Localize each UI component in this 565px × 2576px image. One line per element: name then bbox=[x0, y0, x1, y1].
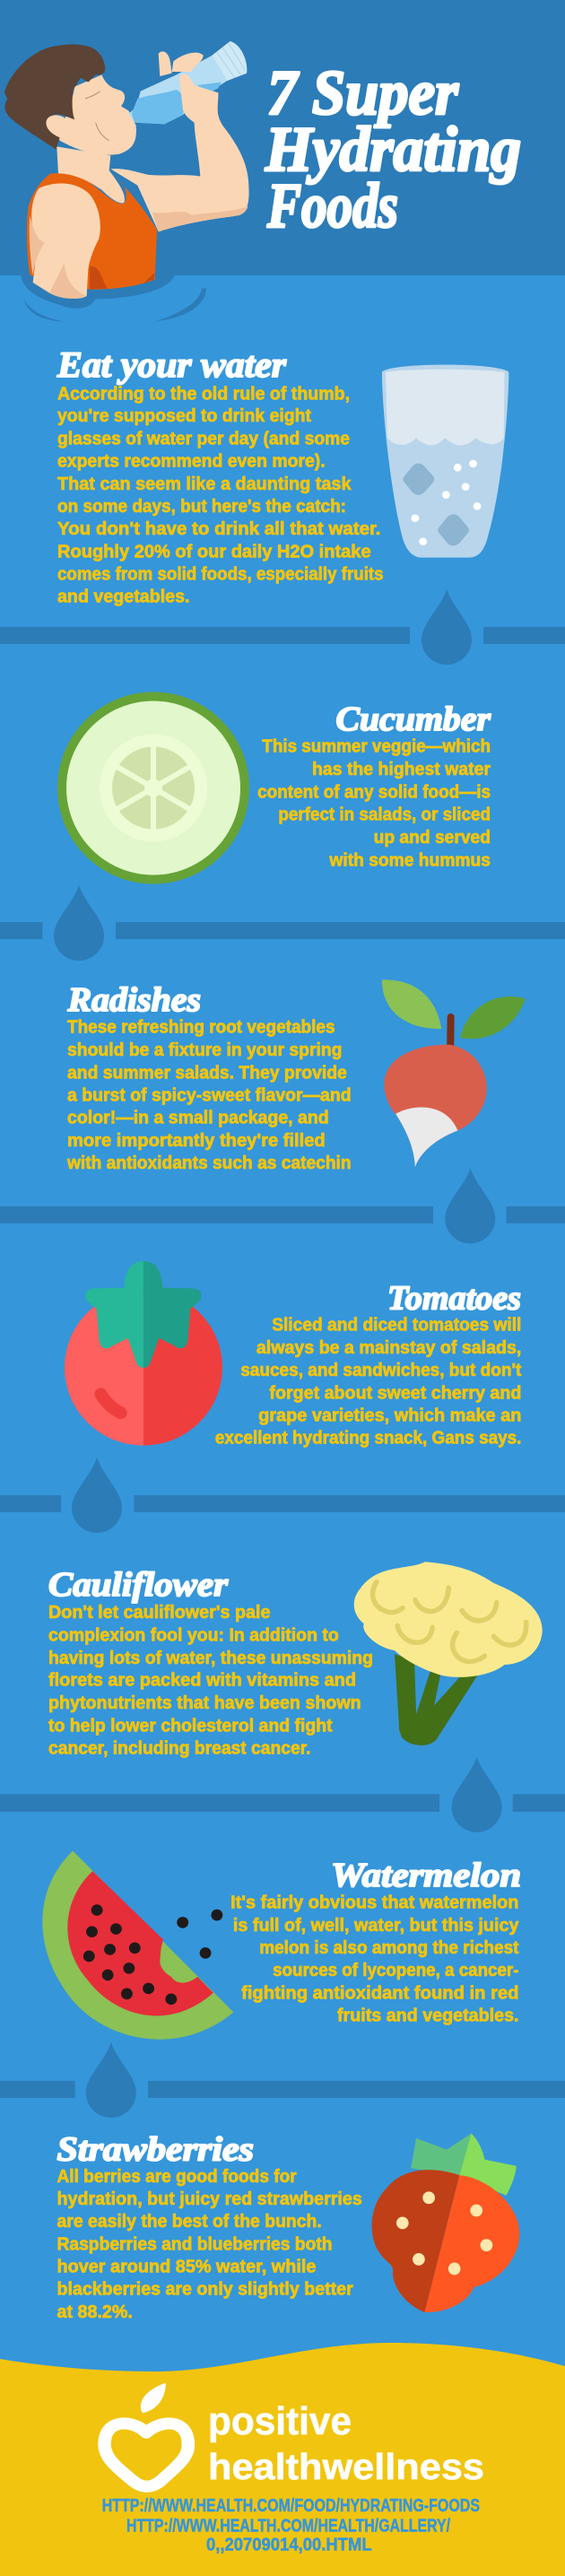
body text: cauliflower: cancer, including breast cancer. bbox=[48, 1739, 310, 1759]
title bbox=[265, 58, 521, 241]
header band bbox=[0, 0, 565, 275]
source links: 0,,20709014,00.HTML bbox=[206, 2536, 372, 2555]
icon: watermelon slice bbox=[42, 1851, 233, 2040]
body text: radishes: should be a fixture in your spring bbox=[67, 1040, 343, 1060]
body text: radishes: a burst of spicy-sweet flavor—and bbox=[67, 1085, 352, 1105]
section: cucumber bbox=[57, 692, 491, 884]
logo: positive healthwellness bbox=[105, 2383, 484, 2487]
body text: radishes: more importantly they're filled bbox=[67, 1131, 326, 1151]
body text: tomatoes: grape varieties, which make an bbox=[258, 1406, 521, 1426]
icon: cauliflower bbox=[354, 1562, 543, 1745]
body text: strawberries: All berries are good foods for bbox=[57, 2167, 297, 2187]
body text: strawberries: hydration, but juicy red strawberries bbox=[57, 2189, 362, 2209]
section: cauliflower bbox=[48, 1562, 543, 1759]
icon: radish bbox=[382, 979, 526, 1167]
body text: radishes bbox=[66, 1018, 352, 1173]
body text: tomatoes: Sliced and diced tomatoes will bbox=[272, 1315, 521, 1335]
section: radishes bbox=[66, 979, 526, 1173]
body text: eat your water: Roughly 20% of our daily H2O intake bbox=[57, 543, 371, 562]
body text: strawberries: at 88.2%. bbox=[57, 2302, 133, 2322]
body text: eat your water: you're supposed to drink eight bbox=[57, 406, 311, 426]
section: eat your water bbox=[56, 344, 508, 607]
heading: cauliflower: Cauliflower bbox=[48, 1566, 229, 1604]
body text: cauliflower: Don't let cauliflower's pale bbox=[48, 1603, 271, 1623]
divider with drop 4 bbox=[0, 1458, 565, 1533]
icon: tomato bbox=[65, 1261, 222, 1446]
title: Hydrating bbox=[265, 115, 521, 185]
body text: cauliflower: complexion fool you: In addition to bbox=[48, 1625, 339, 1645]
section: strawberries bbox=[57, 2131, 519, 2322]
body text: cauliflower: to help lower cholesterol and fight bbox=[48, 1716, 333, 1736]
body text: eat your water: on some days, but here's the catch: bbox=[57, 497, 346, 517]
body text: eat your water: glasses of water per day (and some bbox=[57, 430, 350, 449]
body text: watermelon bbox=[230, 1893, 519, 2026]
divider with drop 1 bbox=[0, 589, 565, 665]
body text: cucumber: content of any solid food—is bbox=[257, 782, 491, 802]
body text: tomatoes bbox=[215, 1315, 522, 1449]
logo: positive healthwellness: healthwellness bbox=[208, 2446, 484, 2487]
body text: tomatoes: forget about sweet cherry and bbox=[269, 1383, 521, 1403]
body text: watermelon: sources of lycopene, a cancer- bbox=[273, 1961, 518, 1980]
body text: cauliflower: florets are packed with vitamins and bbox=[48, 1671, 356, 1691]
body text: eat your water: According to the old rule of thumb, bbox=[57, 384, 350, 404]
body text: cauliflower: phytonutrients that have been shown bbox=[48, 1693, 361, 1713]
body text: eat your water: comes from solid foods, especially fruits bbox=[57, 565, 384, 585]
body text: radishes: These refreshing root vegetables bbox=[67, 1018, 335, 1038]
source links: HTTP://WWW.HEALTH.COM/HEALTH/GALLERY/ bbox=[126, 2516, 450, 2536]
body text: radishes: with antioxidants such as catechin bbox=[66, 1153, 352, 1173]
body text: eat your water bbox=[57, 384, 384, 607]
body text: watermelon: is full of, well, water, but this juicy bbox=[233, 1916, 519, 1936]
heading: cucumber: Cucumber bbox=[335, 701, 491, 738]
section: watermelon bbox=[42, 1851, 521, 2040]
body text: strawberries bbox=[57, 2167, 362, 2322]
body text: cucumber: has the highest water bbox=[312, 760, 491, 779]
body text: tomatoes: always be a mainstay of salads, bbox=[256, 1338, 521, 1358]
divider with drop 5 bbox=[0, 1757, 565, 1832]
illustration: man drinking from a bottle bbox=[4, 41, 249, 321]
body text: cucumber: This summer veggie—which bbox=[262, 737, 491, 757]
heading: tomatoes: Tomatoes bbox=[387, 1279, 521, 1317]
section: tomatoes bbox=[65, 1261, 522, 1449]
title: 7 Super bbox=[267, 58, 459, 128]
body text: radishes: color!—in a small package, and bbox=[67, 1109, 329, 1128]
body text: eat your water: That can seem like a daunting task bbox=[57, 474, 352, 494]
heading: watermelon: Watermelon bbox=[331, 1857, 521, 1894]
body text: cucumber: with some hummus bbox=[328, 850, 491, 870]
icon: strawberry bbox=[372, 2133, 519, 2312]
body text: watermelon: fruits and vegetables. bbox=[337, 2006, 518, 2026]
divider with drop 6 bbox=[0, 2042, 565, 2118]
heading: radishes: Radishes bbox=[66, 981, 201, 1019]
icon: heart apple bbox=[105, 2383, 188, 2486]
body text: cucumber: perfect in salads, or sliced bbox=[278, 805, 491, 825]
source links bbox=[102, 2496, 480, 2555]
body text: cucumber: up and served bbox=[374, 828, 491, 848]
source links: HTTP://WWW.HEALTH.COM/FOOD/HYDRATING-FOODS bbox=[102, 2496, 480, 2516]
divider with drop 2 bbox=[0, 885, 565, 961]
body text: watermelon: fighting antioxidant found in red bbox=[241, 1983, 518, 2003]
body text: eat your water: experts recommend even more). bbox=[57, 452, 326, 472]
body text: cauliflower: having lots of water, these unassuming bbox=[48, 1649, 373, 1668]
footer band bbox=[0, 2343, 565, 2576]
body text: strawberries: Raspberries and blueberries both bbox=[57, 2234, 332, 2254]
heading: eat your water: Eat your water bbox=[56, 344, 286, 385]
body text: strawberries: blackberries are only slightly better bbox=[57, 2280, 353, 2300]
body text: strawberries: hover around 85% water, while bbox=[57, 2257, 316, 2276]
icon: glass of water bbox=[382, 365, 508, 558]
body text: eat your water: and vegetables. bbox=[57, 587, 190, 607]
body text: radishes: and summer salads. They provide bbox=[67, 1063, 347, 1083]
body text: cauliflower bbox=[48, 1603, 373, 1759]
body text: watermelon: It's fairly obvious that watermelon bbox=[230, 1893, 518, 1913]
body text: strawberries: are easily the best of the bunch. bbox=[57, 2212, 322, 2232]
title: Foods bbox=[266, 171, 398, 241]
heading: strawberries: Strawberries bbox=[57, 2131, 254, 2169]
icon: cucumber slice bbox=[57, 692, 249, 884]
body text: tomatoes: excellent hydrating snack, Gans says. bbox=[215, 1429, 521, 1449]
body text: cucumber bbox=[257, 737, 491, 870]
body text: watermelon: melon is also among the richest bbox=[259, 1938, 519, 1958]
wordmark: positive bbox=[208, 2399, 352, 2443]
divider with drop 3 bbox=[0, 1168, 565, 1243]
body text: eat your water: You don't have to drink all that water. bbox=[57, 519, 380, 539]
body text: tomatoes: sauces, and sandwiches, but don't bbox=[240, 1361, 522, 1380]
